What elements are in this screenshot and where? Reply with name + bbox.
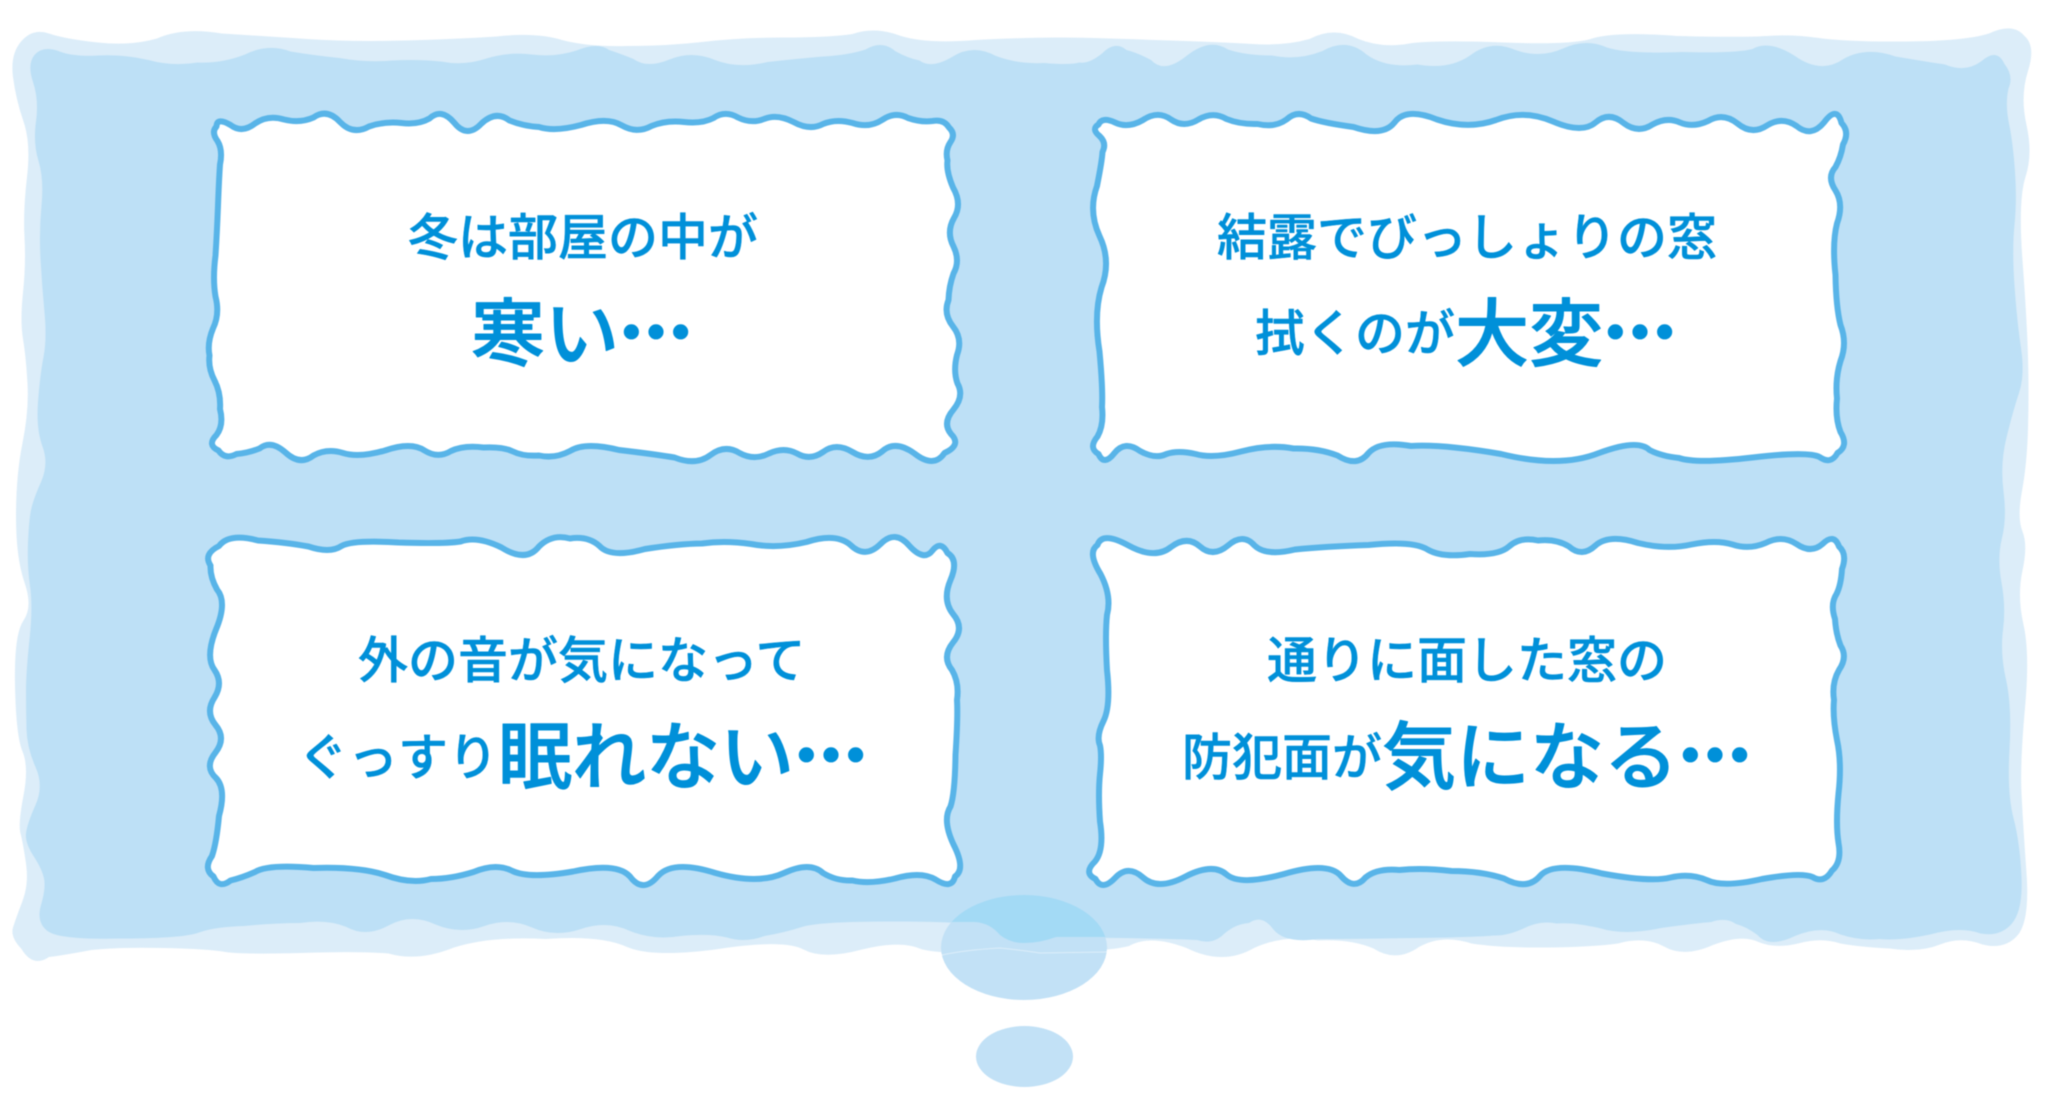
text: worry 1 first line: 冬は部屋の中が	[408, 210, 758, 266]
panel: main blue bubble layer	[26, 43, 2023, 943]
icon: small thought bubble circle	[976, 1026, 1073, 1087]
text: worry 2 first line: 結露でびっしょりの窓	[1217, 210, 1717, 266]
text: worry 2 second line: 拭くのが	[1255, 306, 1455, 362]
panel: worry 2 condensation	[1093, 114, 1846, 461]
text: worry 4 second line: 防犯面が	[1182, 730, 1382, 786]
text: worry 4 first line: 通りに面した窓の	[1267, 633, 1667, 689]
text: worry 3 second line: 眠れない…	[498, 698, 868, 805]
icon: large thought bubble circle	[940, 894, 1108, 1000]
text: worry 2 second line: 大変…	[1455, 275, 1677, 382]
text: worry 3 first line: 外の音が気になって	[358, 633, 806, 689]
text: worry 4 second line: 気になる…	[1382, 698, 1752, 805]
panel: worry 3 outside noise	[208, 537, 960, 885]
panel: worry 1 cold room	[209, 114, 960, 461]
text: worry 3 second line: ぐっすり	[298, 730, 498, 786]
text: worry 1 second line: 寒い…	[471, 275, 693, 382]
panel: worry 4 street-facing window security	[1089, 538, 1844, 885]
